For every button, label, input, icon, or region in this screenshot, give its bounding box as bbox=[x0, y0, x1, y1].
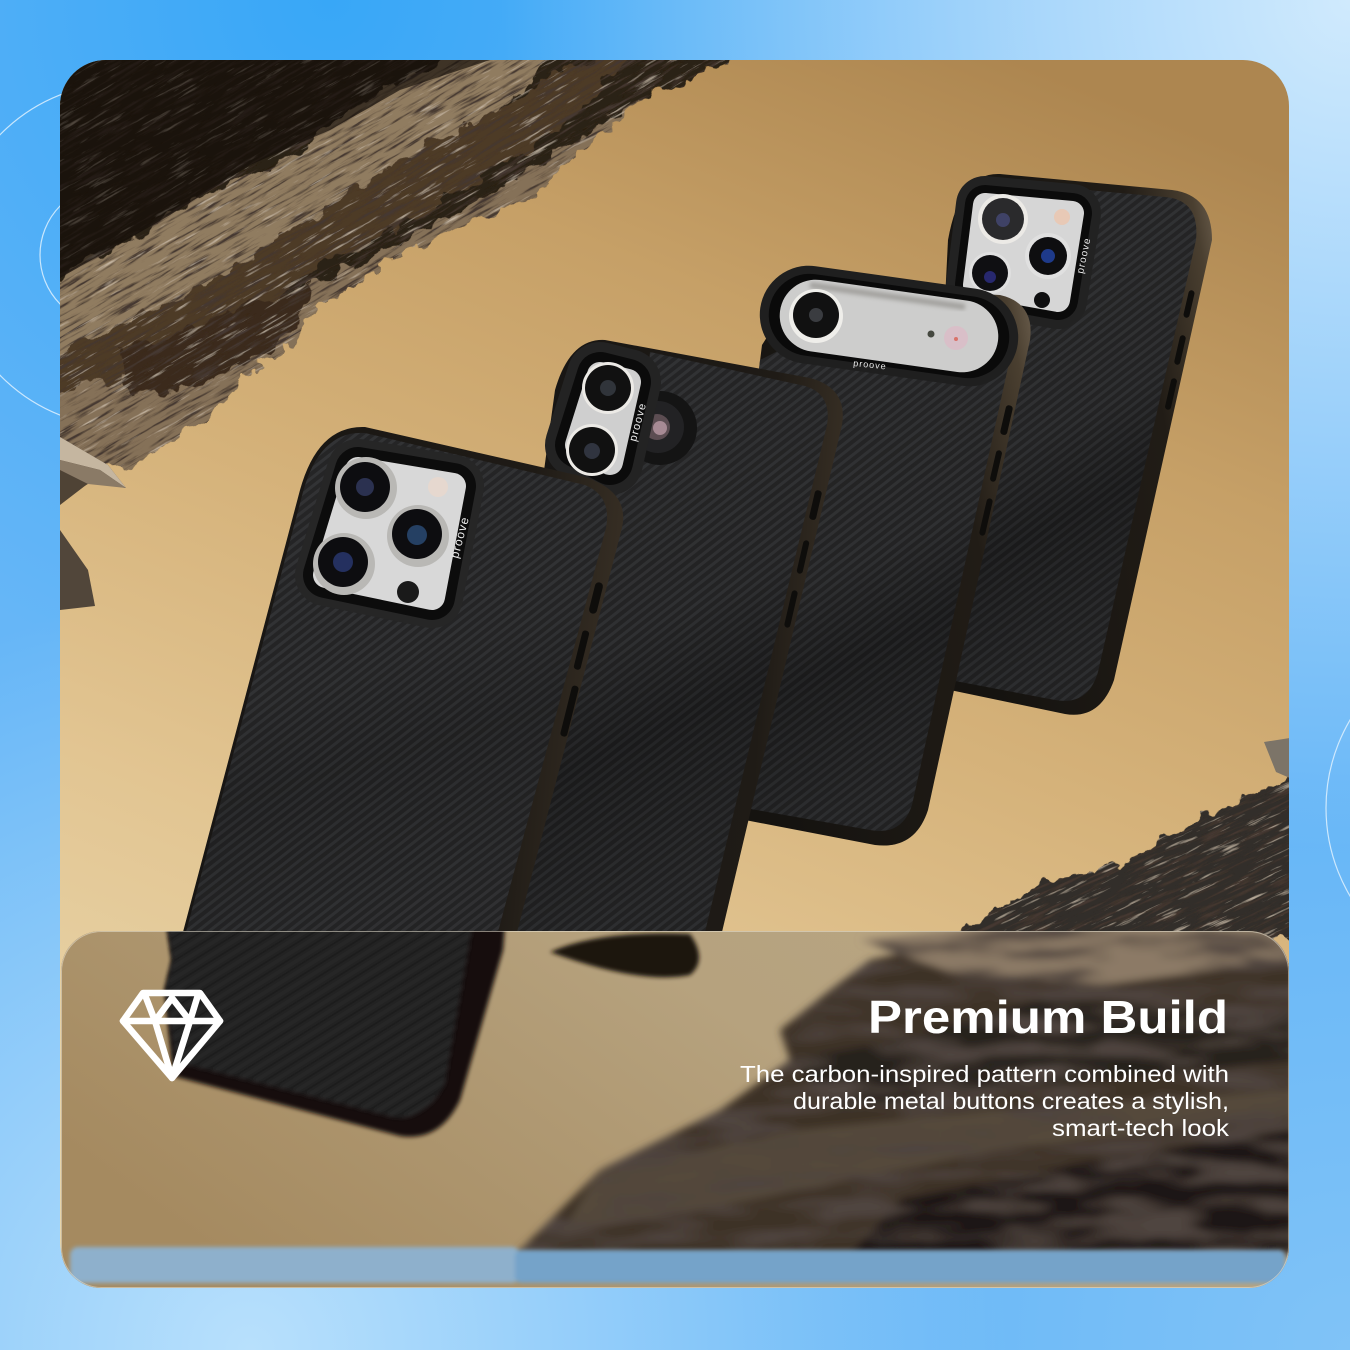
description text: smart-tech look bbox=[1052, 1115, 1230, 1141]
phone 2 camera module bbox=[566, 362, 697, 476]
phone 1 brand mark: proove bbox=[447, 515, 472, 560]
blurred rock bbox=[515, 925, 1295, 1255]
description text: The carbon-inspired pattern combined with bbox=[740, 1061, 1229, 1087]
crystal shard right bbox=[1264, 738, 1290, 778]
blurred phone bbox=[165, 925, 505, 1137]
blue strip reflection bbox=[70, 1247, 1285, 1283]
phone 3 pill camera module bbox=[760, 266, 1018, 386]
decorative outline circles bbox=[0, 83, 1350, 981]
crystal shard upper bbox=[60, 437, 126, 505]
crystal shard lower bbox=[60, 530, 95, 610]
phone 1 camera module bbox=[313, 457, 472, 603]
phone 2 side buttons bbox=[784, 490, 822, 628]
icon: diamond bbox=[123, 993, 220, 1078]
frosted caption panel bbox=[61, 925, 1295, 1288]
dark upper rock shadow bbox=[60, 60, 490, 278]
heading: Premium Build bbox=[868, 991, 1228, 1043]
caption panel backdrop bbox=[61, 931, 1289, 1288]
rock formation bottom right bbox=[960, 777, 1289, 941]
panel rim highlight bbox=[62, 932, 1288, 1288]
phone 3 side buttons bbox=[979, 405, 1013, 536]
phone 3 bbox=[730, 259, 1031, 846]
description text bbox=[740, 1061, 1230, 1141]
phone 2 brand mark: proove bbox=[627, 401, 649, 443]
phone 4 side buttons bbox=[1164, 290, 1195, 410]
blurred dark reflection bbox=[550, 933, 699, 977]
rock formation top left bbox=[60, 60, 730, 486]
phone 4 brand mark: proove bbox=[1075, 237, 1094, 275]
phone 1 bbox=[183, 427, 623, 932]
phone 1 side buttons bbox=[560, 582, 604, 737]
phone 3 brand mark: proove bbox=[853, 358, 887, 371]
phone 2 bbox=[510, 340, 843, 932]
description text: durable metal buttons creates a stylish, bbox=[793, 1088, 1229, 1114]
phone 4 camera module bbox=[969, 194, 1094, 308]
phone 4 bbox=[940, 174, 1212, 715]
